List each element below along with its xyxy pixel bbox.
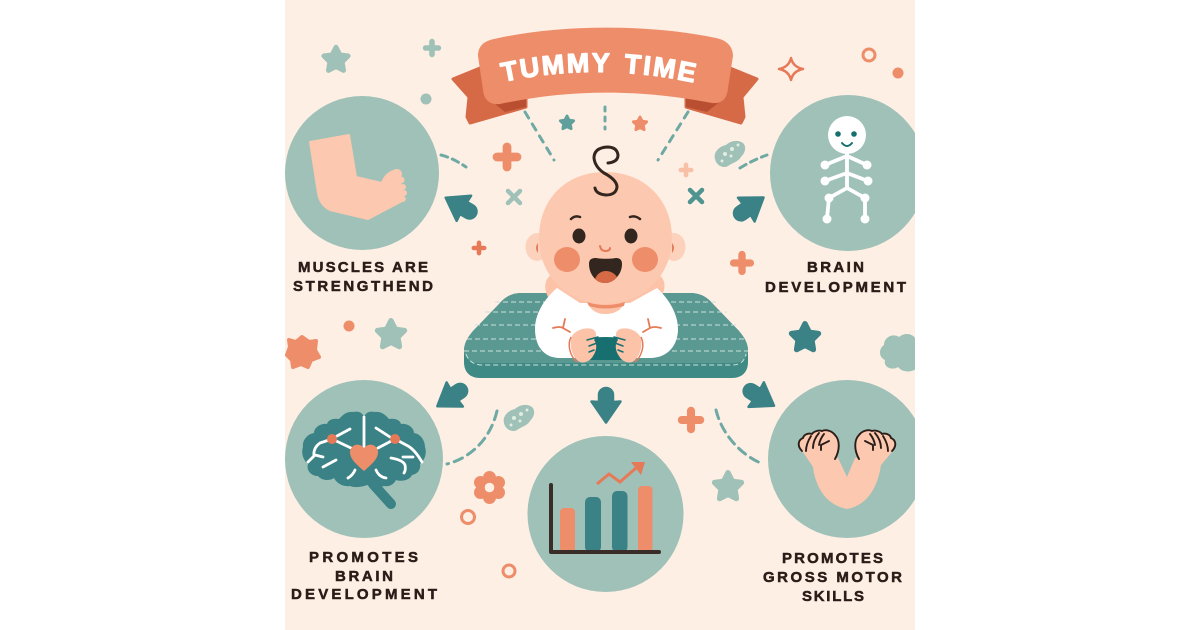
label: brain development	[766, 262, 906, 292]
brain circle	[285, 380, 443, 538]
icon: brain	[302, 412, 426, 504]
muscles circle	[285, 96, 439, 250]
arrow to skeleton	[732, 196, 765, 223]
banner fold shadows	[490, 98, 722, 112]
right fist	[855, 430, 895, 459]
hair curl	[594, 147, 618, 195]
right hand	[614, 328, 643, 363]
infographic canvas	[285, 0, 915, 630]
trend arrow	[597, 462, 645, 484]
bar chart	[551, 462, 659, 552]
panel: brain	[285, 380, 443, 603]
baby onesie	[535, 288, 678, 358]
baby	[526, 147, 686, 363]
arrow to muscles	[444, 194, 478, 222]
banner right tail	[686, 68, 757, 123]
onesie elbow marks	[553, 319, 661, 332]
banner	[451, 28, 759, 124]
label: muscles are strengthend: STRENGTHEND	[293, 278, 433, 295]
icon: skeleton	[820, 116, 872, 224]
banner main ribbon	[478, 28, 733, 104]
panel: muscles	[285, 96, 439, 295]
panel: chart	[528, 436, 684, 592]
left fist	[799, 430, 839, 459]
label: brain development: BRAIN	[807, 259, 864, 276]
left ear	[526, 233, 548, 261]
label: promotes brain development: DEVELOPMENT	[291, 586, 437, 603]
decorative dashed rays	[441, 107, 767, 464]
label: muscles are strengthend	[293, 262, 433, 292]
neck and collar	[587, 302, 625, 314]
arrow to brain	[436, 381, 468, 408]
label: promotes gross motor skills: GROSS MOTOR	[763, 569, 902, 586]
chart circle	[528, 436, 684, 592]
mat	[464, 293, 748, 378]
cheeks	[554, 247, 658, 272]
title	[503, 72, 700, 84]
label: muscles are strengthend: MUSCLES ARE	[298, 259, 428, 276]
flower	[474, 471, 505, 504]
right ear	[662, 233, 686, 261]
skeleton circle	[770, 95, 926, 251]
head	[539, 172, 672, 304]
label: promotes brain development: BRAIN	[335, 568, 393, 585]
label: promotes brain development: PROMOTES	[309, 549, 418, 566]
page background	[285, 0, 915, 630]
mat gripped in hands	[584, 337, 628, 360]
label: promotes brain development	[292, 552, 438, 600]
eyebrows	[571, 216, 640, 219]
label: promotes gross motor skills: SKILLS	[802, 588, 864, 605]
mouth	[589, 258, 622, 283]
arrow to arms	[742, 381, 776, 408]
decorative stars, plus signs and dots	[287, 42, 916, 577]
panel: skeleton	[765, 95, 926, 296]
arms circle	[768, 380, 926, 538]
left hand	[569, 328, 598, 363]
panel: arms	[763, 380, 926, 605]
banner: TUMMY TIME	[499, 52, 697, 83]
baby shoulders	[545, 272, 665, 318]
banner left tail	[453, 68, 526, 123]
icon: foot	[310, 135, 407, 219]
arrow to chart	[592, 388, 620, 422]
label: promotes gross motor skills	[763, 552, 902, 602]
icon: heart	[350, 445, 378, 471]
icon: flexed arms	[799, 430, 895, 509]
eyes	[572, 228, 638, 244]
label: brain development: DEVELOPMENT	[765, 279, 906, 296]
label: promotes gross motor skills: PROMOTES	[782, 550, 883, 567]
nose	[600, 246, 610, 251]
